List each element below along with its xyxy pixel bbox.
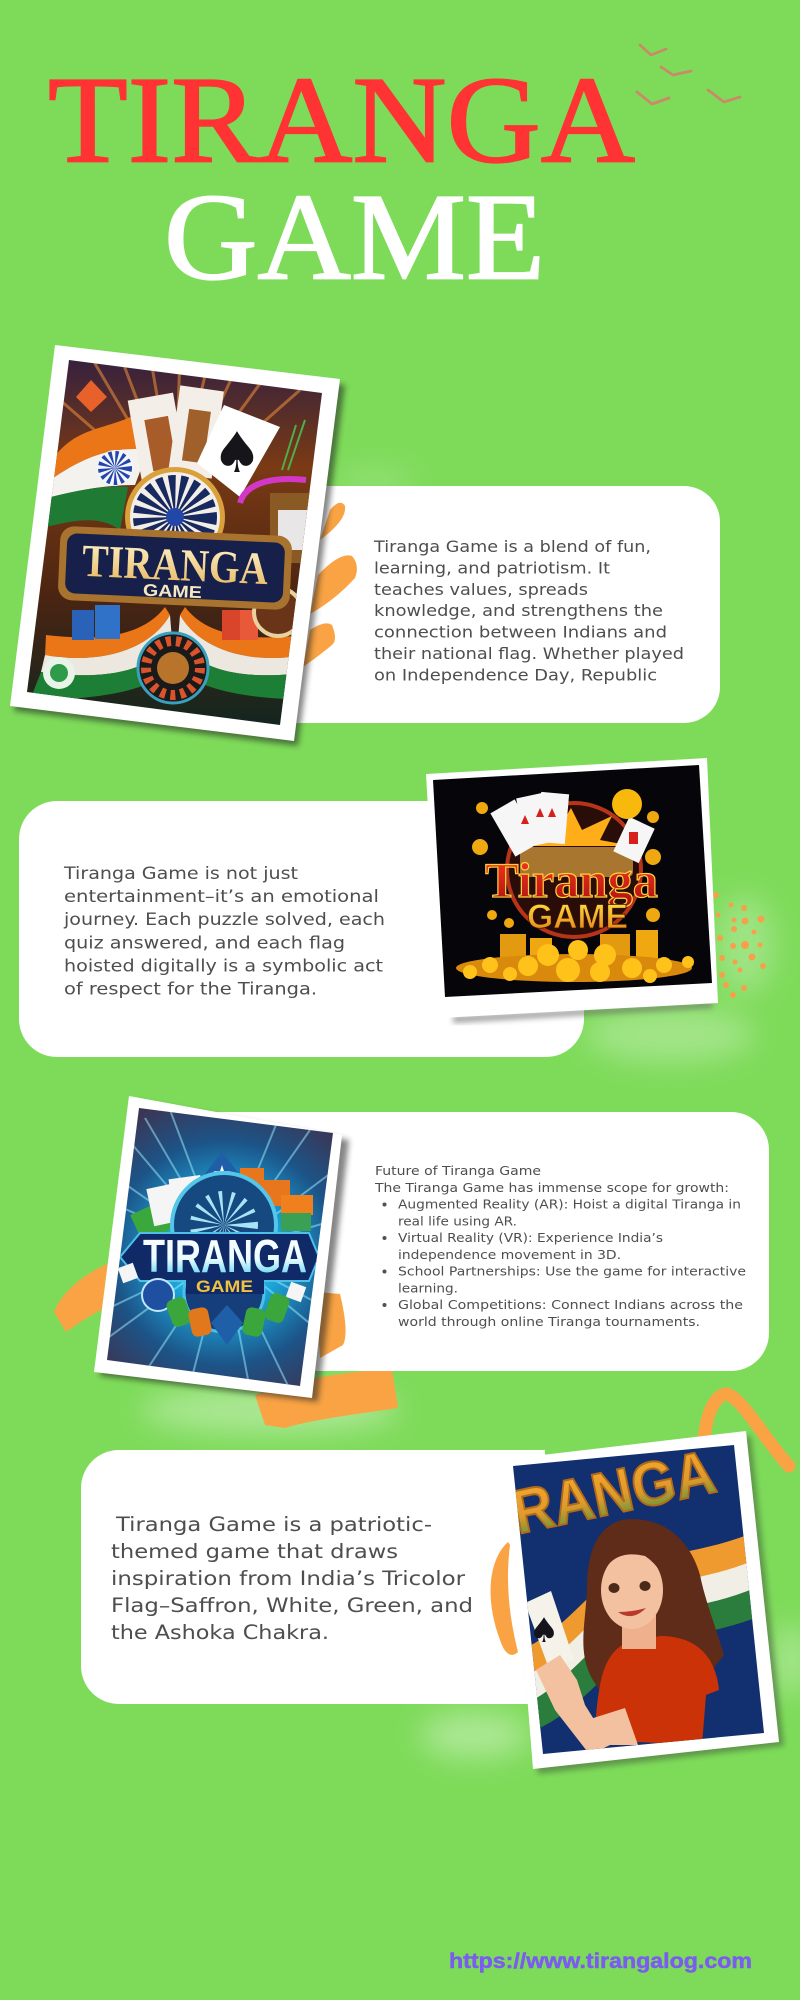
panel 2 text: hoisted digitally is a symbolic act [64, 956, 383, 976]
panel 3 photo [94, 1096, 349, 1402]
panel 1 text: knowledge, and strengthens the [374, 601, 663, 620]
panel 2 text: journey. Each puzzle solved, each [63, 910, 385, 930]
panel 4 text: themed game that draws [111, 1540, 398, 1563]
panel 4 photo: RANGA [507, 1438, 721, 1548]
panel 1 text: learning, and patriotism. It [374, 558, 610, 577]
bullet list: real life using AR. [398, 1213, 517, 1228]
panel 1 text: their national flag. Whether played [374, 644, 684, 663]
link: website URL: https://www.tirangalog.com [449, 1950, 752, 1973]
panel 4 photo [505, 1431, 784, 1774]
panel 4 text: Flag–Saffron, White, Green, and [111, 1594, 473, 1617]
orange crescent stroke [491, 1542, 518, 1655]
panel 2 text: Tiranga Game is not just [63, 864, 298, 884]
title line: GAME: GAME [164, 168, 545, 306]
orange brush stroke on panel 3 [316, 1292, 346, 1358]
panel 1 text: on Independence Day, Republic [374, 665, 657, 684]
icon: birds [637, 45, 740, 104]
orange dots [713, 892, 766, 998]
banner: GAME [143, 581, 202, 602]
bullet list [382, 1196, 746, 1329]
panel 4 text: the Ashoka Chakra. [111, 1621, 329, 1644]
bullet list: Augmented Reality (AR): Hoist a digital Tiranga in [398, 1196, 741, 1212]
panel 2 photo: Tiranga [485, 852, 658, 908]
bullet list: Global Competitions: Connect Indians across the [398, 1297, 743, 1312]
panel 1 photo: ♠ [212, 421, 262, 486]
panel 2 photo [425, 758, 720, 1023]
title [48, 52, 635, 306]
panel 3 text: Future of Tiranga Game [375, 1163, 541, 1178]
bullet list: independence movement in 3D. [398, 1247, 621, 1262]
panel 3 text [374, 1163, 746, 1329]
panel 4 text: inspiration from India’s Tricolor [111, 1567, 466, 1590]
panel 1 text [373, 537, 684, 684]
orange arc [704, 1394, 789, 1466]
panel 2 card [19, 801, 584, 1057]
panel 3 text: The Tiranga Game has immense scope for growth: [374, 1180, 729, 1195]
panel 2 photo: GAME [527, 898, 628, 936]
coin pile [456, 930, 694, 983]
title line: TIRANGA: TIRANGA [48, 52, 635, 188]
panel 3 card [200, 1112, 769, 1371]
panel 4 text [111, 1513, 473, 1644]
orange brush strokes on panel 1 [303, 503, 357, 667]
bullet list: School Partnerships: Use the game for interactive [398, 1264, 746, 1278]
bullet list: world through online Tiranga tournaments. [398, 1314, 700, 1329]
panel 3 photo: ★ [212, 1162, 232, 1187]
panel 1 text: connection between Indians and [374, 623, 667, 642]
panel 3 photo: TIRANGA [143, 1230, 307, 1282]
panel 4 text: Tiranga Game is a patriotic- [115, 1513, 432, 1536]
panel 2 text: entertainment–it’s an emotional [64, 887, 379, 907]
playing cards [490, 792, 655, 863]
panel 1 text: teaches values, spreads [374, 580, 588, 599]
banner [57, 526, 293, 610]
panel 3 photo: GAME [196, 1277, 253, 1296]
banner: TIRANGA [81, 535, 269, 594]
panel 1 photo [10, 345, 345, 746]
bullet list: learning. [398, 1280, 458, 1295]
panel 1 card [200, 486, 720, 723]
panel 2 text: of respect for the Tiranga. [64, 980, 317, 1000]
panel 2 text: quiz answered, and each flag [64, 933, 345, 953]
panel 2 text [63, 864, 385, 1000]
bullet list: Virtual Reality (VR): Experience India’s [398, 1230, 663, 1245]
panel 1 text: Tiranga Game is a blend of fun, [373, 537, 651, 556]
panel 4 photo: ♠ [529, 1611, 559, 1651]
decorative smudges [140, 472, 800, 1759]
orange brush strokes behind panel 3 [54, 1262, 398, 1428]
panel 4 card [81, 1450, 545, 1704]
